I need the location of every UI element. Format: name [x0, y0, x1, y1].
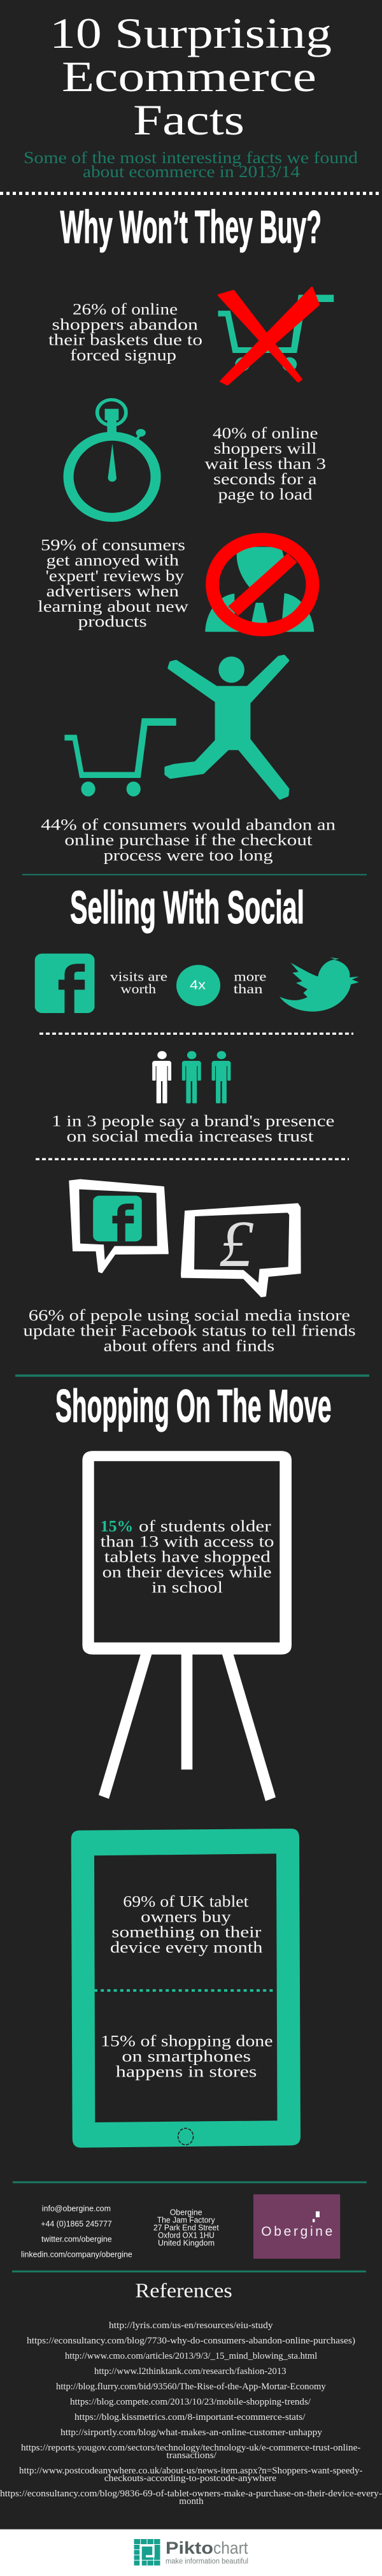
- badge: 4x: [176, 965, 220, 1006]
- text: reference links: checkouts-according-to-postcode-anywhere: [104, 2473, 276, 2484]
- icon: twitter bird: [279, 958, 359, 1012]
- text: 44% abandon checkout: process were too long: [104, 847, 273, 865]
- text: 59% annoyed with expert reviews: [38, 536, 188, 630]
- text: 26% abandon baskets: [48, 301, 202, 364]
- text: reference links: https://econsultancy.com/blog/7730-why-do-consumers-abandon-online-purchases): [27, 2336, 355, 2346]
- text: 69% of UK tablet owners: something on their: [111, 1924, 262, 1941]
- text: reference links: http://www.cmo.com/articles/2013/9/3/_15_mind_blowing_sta.html: [65, 2351, 317, 2361]
- text: reference links: month: [179, 2496, 204, 2507]
- text: 1 in 3 people: on social media increases trust: [66, 1128, 314, 1146]
- text: 15% of students: in school: [152, 1579, 223, 1596]
- icon: person running from cart: [64, 656, 288, 798]
- icon: piktochart mark: [134, 2539, 160, 2566]
- icon: crossed-out shopping cart: [218, 288, 334, 384]
- panel: piktochart footer: [0, 2529, 382, 2576]
- text: address: United Kingdom: [158, 2238, 215, 2248]
- text: reference links: [0, 2321, 382, 2507]
- text: 59% annoyed with expert reviews: advertisers when: [46, 583, 180, 600]
- text: 15% of shopping: happens in stores: [116, 2064, 257, 2081]
- heading: references: References: [135, 2279, 232, 2302]
- text: 26% abandon baskets: forced signup: [70, 347, 176, 364]
- text: address: The Jam Factory: [157, 2215, 215, 2225]
- text: 1 in 3 people: 1 in 3 people say a brand's presence: [52, 1113, 334, 1130]
- panel: why won't they buy: [38, 202, 336, 865]
- text: 1 in 3 people: [52, 1113, 334, 1146]
- text: contact details: twitter.com/obergine: [41, 2234, 112, 2244]
- text: reference links: https://blog.kissmetrics.com/8-important-ecommerce-stats/: [74, 2412, 306, 2422]
- text: 40% wait less than 3 seconds: [205, 425, 326, 503]
- subtitle: Some of the most interesting facts we found: [24, 148, 358, 167]
- icon: home button: [178, 2128, 194, 2145]
- icon: stopwatch: [69, 399, 156, 517]
- text: 44% abandon checkout: 44% of consumers would abandon an: [41, 817, 336, 834]
- text: visits are worth: visits are: [110, 968, 167, 984]
- text: more than: than: [234, 981, 263, 997]
- icon: tablet: [71, 1829, 301, 2148]
- text: reference links: https://reports.yougov.com/sectors/technology/technology-uk/e-commerce-trust-online-: [21, 2443, 360, 2453]
- subtitle: about ecommerce in 2013/14: [83, 162, 300, 181]
- panel: selling with social: [23, 882, 359, 1355]
- text: contact details: linkedin.com/company/obergine: [21, 2250, 132, 2259]
- text: reference links: https://econsultancy.com/blog/9836-69-of-tablet-owners-make-a-purchase-on-their-device-every-: [0, 2489, 382, 2499]
- text: 44% abandon checkout: online purchase if the checkout: [64, 832, 313, 849]
- text: 40% wait less than 3 seconds: shoppers will: [214, 440, 317, 457]
- text: address: 27 Park End Street: [153, 2223, 219, 2233]
- title: 10 Surprising: [50, 9, 332, 57]
- text: reference links: http://www.postcodeanywhere.co.uk/about-us/news-item.aspx?n=Shoppers-want-speedy-: [19, 2466, 363, 2476]
- text: 15% of students: of students older: [139, 1518, 271, 1535]
- subtitle: [24, 148, 358, 181]
- person: teal: [182, 1051, 201, 1104]
- text: 40% wait less than 3 seconds: wait less than 3: [205, 456, 326, 473]
- logo: obergine: Obergine: [261, 2224, 332, 2239]
- icon: facebook: [35, 954, 94, 1013]
- icon: speech bubble with pound sign: [181, 1204, 301, 1297]
- text: contact details: +44 (0)1865 245777: [41, 2219, 112, 2229]
- text: 44% abandon checkout: [41, 817, 336, 865]
- icon: banned expert person: [205, 540, 314, 632]
- text: piktochart wordmark: chart: [213, 2538, 248, 2558]
- icon: three people, one highlighted: [152, 1051, 230, 1104]
- text: visits are worth: worth: [120, 981, 157, 997]
- text: 40% wait less than 3 seconds: page to load: [218, 486, 313, 503]
- text: 66% update facebook status: 66% of pepole using social media instore: [29, 1307, 350, 1325]
- text: 15% of shopping: 15% of shopping done: [101, 2033, 273, 2050]
- text: 59% annoyed with expert reviews: 59% of consumers: [41, 536, 185, 554]
- text: 15% of students: 15%: [101, 1518, 133, 1535]
- text: 26% abandon baskets: their baskets due to: [48, 332, 202, 349]
- text: 59% annoyed with expert reviews: learning about new: [38, 598, 188, 615]
- text: 69% of UK tablet owners: 69% of UK tablet: [123, 1894, 248, 1911]
- text: piktochart wordmark: Pikto: [166, 2538, 213, 2558]
- text: 40% wait less than 3 seconds: seconds for a: [213, 471, 317, 488]
- text: reference links: http://blog.flurry.com/bid/93560/The-Rise-of-the-App-Mortar-Economy: [56, 2382, 326, 2392]
- text: 15% of shopping: on smartphones: [122, 2048, 251, 2066]
- text: reference links: transactions/: [166, 2450, 217, 2461]
- text: 15% of students: than 13 with access to: [101, 1533, 274, 1550]
- icon: running person: [166, 656, 288, 798]
- text: contact details: [21, 2204, 132, 2259]
- text: piktochart wordmark: [166, 2538, 248, 2566]
- panel: shopping on the move: [55, 1381, 331, 2148]
- icon: cart: [64, 718, 176, 796]
- text: 15% of students: on their devices while: [103, 1564, 272, 1581]
- panel: contact: [21, 2194, 340, 2259]
- text: 15% of students: tablets have shopped: [104, 1548, 271, 1565]
- badge: 4x: 4x: [190, 978, 206, 992]
- text: 59% annoyed with expert reviews: get annoyed with: [46, 552, 180, 569]
- text: 15% of students: [101, 1518, 274, 1596]
- logo: obergine: [253, 2194, 340, 2259]
- text: reference links: http://sirportly.com/blog/what-makes-an-online-customer-unhappy: [60, 2428, 323, 2438]
- panel: references: [0, 2279, 382, 2507]
- text: 66% update facebook status: [23, 1307, 356, 1355]
- text: visits are worth: [110, 968, 167, 997]
- text: 26% abandon baskets: 26% of online: [73, 301, 178, 318]
- text: 69% of UK tablet owners: device every month: [110, 1939, 263, 1957]
- text: reference links: http://lyris.com/us-en/resources/eiu-study: [109, 2321, 273, 2331]
- icon: easel board: [82, 1451, 292, 1801]
- text: contact details: info@obergine.com: [42, 2204, 111, 2213]
- text: 66% update facebook status: update their Facebook status to tell friends: [23, 1323, 356, 1340]
- text: 40% wait less than 3 seconds: 40% of online: [213, 425, 318, 442]
- text: piktochart wordmark: make information beautiful: [166, 2558, 248, 2566]
- title: [50, 9, 332, 144]
- text: 66% update facebook status: about offers and finds: [104, 1338, 274, 1355]
- person: teal second: [212, 1051, 230, 1104]
- text: address: Oxford OX1 1HU: [158, 2231, 215, 2240]
- text: address: [153, 2208, 219, 2248]
- text: reference links: http://www.l2thinktank.com/research/fashion-2013: [94, 2366, 286, 2377]
- text: 59% annoyed with expert reviews: products: [78, 613, 147, 630]
- title: Facts: [133, 96, 244, 144]
- text: 26% abandon baskets: shoppers abandon: [52, 317, 199, 334]
- person: white: [152, 1051, 171, 1104]
- text: 69% of UK tablet owners: owners buy: [141, 1909, 231, 1926]
- text: reference links: https://blog.compete.com/2013/10/23/mobile-shopping-trends/: [70, 2397, 311, 2407]
- title: Ecommerce: [62, 52, 316, 101]
- text: 69% of UK tablet owners: [110, 1894, 263, 1957]
- text: address: Obergine: [170, 2208, 202, 2217]
- text: 59% annoyed with expert reviews: 'expert' reviews by: [46, 568, 185, 585]
- icon: speech bubble with pound sign: £: [219, 1207, 254, 1281]
- text: more than: more: [234, 968, 266, 984]
- icon: speech bubble with facebook: [69, 1179, 168, 1273]
- text: 15% of shopping: [101, 2033, 273, 2081]
- text: more than: [234, 968, 266, 997]
